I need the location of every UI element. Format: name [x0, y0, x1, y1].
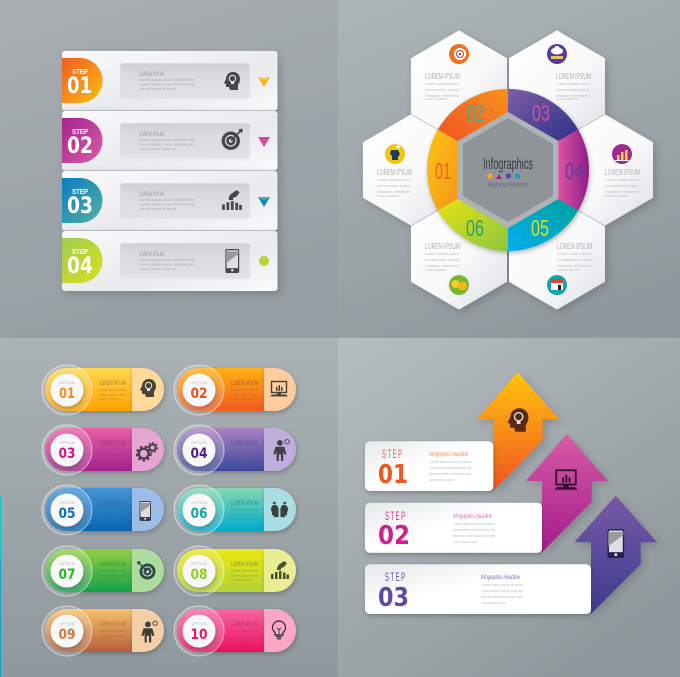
card: step 03: Lorem ipsum dolor sit amet elit [139, 197, 195, 202]
card: step 02: STEP [72, 129, 88, 136]
pill: option 06: Lorem ipsum [231, 516, 252, 521]
card: step 04: 04 [67, 254, 93, 279]
card: step 03: Lorem ipsum dolor sit [139, 206, 177, 211]
card: step 02 text: Infographics Headline [453, 513, 492, 520]
pill: option 08: Lorem ipsum dolor [231, 568, 259, 573]
hexagon labels and text: Lorem ipsum [425, 96, 448, 101]
card: step 01: STEP [72, 69, 88, 76]
pill: option 06: Lorem ipsum dolor [231, 512, 259, 517]
pill: option 10: LOREM IPSUM [231, 622, 258, 628]
pill: option 03: LOREM IPSUM [99, 441, 126, 447]
hexagon labels and text: Lorem ipsum [425, 267, 448, 272]
card: step 01 text: Lorem ipsum dolor [429, 477, 455, 482]
pill: option 03: OPTION [59, 440, 75, 445]
panel: three arrow steps [365, 372, 657, 614]
card: step 03 [62, 171, 278, 230]
segment 06: 06 [466, 215, 484, 241]
card: step 04: Lorem ipsum dolor sit amet elit [139, 257, 195, 262]
arrow: step 02 [526, 434, 608, 552]
card: step 03 text: 03 [378, 583, 409, 613]
centre hexagon [458, 112, 558, 228]
card: step 03: LOREM IPSUM [139, 192, 164, 198]
hexagon labels and text: LOREM IPSUM [377, 168, 412, 177]
segment 03: 03 [532, 100, 550, 126]
pill: option 04: Lorem ipsum [231, 456, 252, 461]
pill: option 07 [42, 546, 164, 596]
card: step 02: Lorem ipsum dolor sit [139, 146, 177, 151]
card: step 04: LOREM IPSUM [139, 252, 164, 258]
segment 04 [558, 130, 589, 210]
card: step 03 text: consectetur adipis cing elit [481, 588, 524, 593]
pill: option 01: Lorem ipsum dolor [99, 392, 127, 397]
pill: option 10: Lorem ipsum [231, 637, 252, 642]
card: step 01: 01 [67, 74, 92, 99]
hexagon labels and text: consectetur adipis [425, 87, 459, 92]
segment 05 [508, 199, 578, 251]
hexagon labels and text: Lorem ipsum dolor [605, 177, 640, 182]
pill: option 08: 08 [190, 567, 208, 583]
card: step 03 text: Nullam eleifend lacinia eget [481, 594, 524, 599]
card: step 01: Lorem ipsum dolor sit amet elit [139, 77, 195, 82]
hexagon labels and text: LOREM IPSUM [556, 72, 591, 81]
card: step 01 text: 01 [378, 460, 408, 490]
card: step 01: LOREM IPSUM [139, 72, 164, 78]
icon: shop badge [547, 275, 567, 295]
hexagon labels and text: Lorem ipsum dolor [557, 251, 592, 256]
pill: option 07: LOREM IPSUM [99, 562, 126, 568]
pill: option 02: Lorem ipsum [231, 396, 252, 401]
pill: option 06: OPTION [191, 500, 207, 505]
pill: option 09 [42, 606, 164, 656]
hexagon petals [363, 30, 653, 310]
pill: option 07: Lorem ipsum [99, 577, 120, 582]
pill: option 09: 09 [58, 627, 76, 643]
pill: option 04: 04 [190, 446, 208, 462]
pill: option 01: LOREM IPSUM [99, 381, 126, 387]
hexagon labels and text: LOREM IPSUM [557, 242, 592, 251]
card: step 01 text: STEP [382, 448, 404, 462]
hexagon labels and text: consectetur adipis [425, 257, 459, 262]
card: step 03: Lorem ipsum dolor sit amet elit [139, 202, 195, 206]
card: step 02 text: Lorem ipsum dolor sit amet [453, 521, 496, 526]
pill: option 03 [42, 425, 164, 475]
segment 01: 01 [435, 158, 451, 184]
pill: option 05: LOREM IPSUM [99, 501, 126, 507]
subtitle: Business Elements: Business Elements [488, 182, 528, 189]
segment 05: 05 [531, 215, 549, 241]
hexagon labels and text: consectetur adipis [377, 183, 411, 188]
pill: option 04: OPTION [191, 440, 207, 445]
pill: option 03: 03 [58, 446, 76, 462]
card: step 03 text: STEP [385, 571, 407, 585]
segment 02: 02 [467, 100, 484, 126]
pill: option 10: Lorem ipsum dolor [231, 633, 259, 638]
pill: option 07: Lorem ipsum dolor [99, 573, 127, 578]
pill: option 10: Lorem ipsum dolor [231, 628, 259, 633]
card: step 03 text: Lorem ipsum dolor sit amet [481, 582, 524, 587]
hexagon labels and text [377, 72, 640, 272]
card: step 01 text [365, 441, 493, 491]
small coloured shapes [487, 173, 530, 179]
hexagon labels and text: Lorem ipsum dolor [556, 81, 591, 86]
pill: option 02: LOREM IPSUM [231, 381, 258, 387]
hexagon labels and text: Lorem ipsum [556, 96, 579, 101]
panel: four step cards [62, 51, 278, 291]
pill: option 10: 10 [190, 627, 208, 643]
card: step 03 text: Lorem ipsum dolor [481, 600, 507, 605]
card: step 03 text [365, 564, 591, 614]
hexagon labels and text: consectetur adipis [605, 183, 639, 188]
hexagon labels and text: consectetur adipis [557, 257, 591, 262]
pill: option 05: Lorem ipsum dolor [99, 512, 127, 517]
hexagon labels and text: Nullam eleifend [425, 93, 459, 98]
pill: option 08: Lorem ipsum [231, 577, 252, 582]
pill: option 05: Lorem ipsum [99, 516, 120, 521]
panel: ten option pills [42, 365, 296, 656]
arrow: step 03 [574, 496, 657, 614]
hexagon labels and text: LOREM IPSUM [425, 72, 460, 81]
hexagon labels and text: Nullam eleifend [377, 189, 411, 194]
pill: option 06: LOREM IPSUM [231, 501, 258, 507]
pill: option 03: Lorem ipsum [99, 456, 120, 461]
pill: option 10 [174, 606, 296, 656]
card: step 02: LOREM IPSUM [139, 132, 164, 138]
hexagon labels and text: Lorem ipsum [377, 193, 400, 198]
card: step 02: Lorem ipsum dolor sit amet elit [139, 142, 195, 146]
pill: option 06: 06 [190, 506, 208, 522]
segment 01 [427, 130, 458, 210]
segment 06 [438, 199, 508, 251]
pill: option 03: Lorem ipsum dolor [99, 452, 127, 457]
card: step 02 text: consectetur adipis cing elit [453, 527, 496, 532]
card: step 03: 03 [67, 194, 93, 219]
pill: option 02: OPTION [191, 380, 207, 385]
card: step 01 text: Infographics Headline [429, 451, 468, 458]
title: Infographics: Infographics [483, 156, 533, 173]
icon: chart badge [612, 144, 632, 164]
segment 04: 04 [565, 158, 583, 184]
pill: option 08: OPTION [191, 561, 207, 566]
pill: option 05: 05 [58, 506, 76, 522]
ring: six coloured segments [427, 89, 589, 251]
pill: option 04: Lorem ipsum dolor [231, 447, 259, 452]
pill: option 05 [42, 485, 164, 535]
pill: option 08 [174, 546, 296, 596]
pill: option 02: Lorem ipsum dolor [231, 387, 259, 392]
pill: option 09: Lorem ipsum [99, 637, 120, 642]
card: step 04: Lorem ipsum dolor sit [139, 266, 177, 271]
segment 03 [508, 89, 578, 141]
pill: option 07: Lorem ipsum dolor [99, 568, 127, 573]
pill: option 04: LOREM IPSUM [231, 441, 258, 447]
hexagon labels and text: Lorem ipsum dolor [377, 177, 412, 182]
pill: option 10: OPTION [191, 621, 207, 626]
pill: option 04 [174, 425, 296, 475]
card: step 04: Lorem ipsum dolor sit amet elit [139, 262, 195, 266]
pill: option 05: OPTION [59, 500, 75, 505]
pill: option 06 [174, 485, 296, 535]
hexagon labels and text: consectetur adipis [556, 87, 590, 92]
hexagon labels and text: Nullam eleifend [605, 189, 639, 194]
pill: option 02: Lorem ipsum dolor [231, 392, 259, 397]
pill: option 01 [42, 365, 164, 415]
pill: option 07: OPTION [59, 561, 75, 566]
card: step 01 text: Nullam eleifend lacinia eget [429, 471, 472, 476]
hexagon labels and text: LOREM IPSUM [605, 168, 640, 177]
pill: option 01: Lorem ipsum [99, 396, 120, 401]
card: step 03 text: Infographics Headline [481, 574, 520, 581]
pill: option 05: Lorem ipsum dolor [99, 507, 127, 512]
hexagon labels and text: Nullam eleifend [556, 93, 590, 98]
card: step 02 [62, 111, 278, 170]
hexagon labels and text: Lorem ipsum dolor [425, 81, 460, 86]
hexagon labels and text: Lorem ipsum dolor [425, 251, 460, 256]
pill: option 07: 07 [58, 567, 76, 583]
pill: option 06: Lorem ipsum dolor [231, 507, 259, 512]
pill: option 09: OPTION [59, 621, 75, 626]
pill: option 03: Lorem ipsum dolor [99, 447, 127, 452]
card: step 02 text: Nullam eleifend lacinia eget [453, 533, 496, 538]
pill: option 04: Lorem ipsum dolor [231, 452, 259, 457]
pill: option 01: 01 [59, 386, 75, 402]
icon: target badge [449, 44, 469, 64]
icon: cloud badge [547, 44, 567, 64]
hexagon labels and text: Nullam eleifend [557, 263, 591, 268]
card: step 02: Lorem ipsum dolor sit amet elit [139, 137, 195, 142]
card: step 01 text: consectetur adipis cing elit [429, 465, 472, 470]
card: step 02 text [365, 503, 542, 553]
hexagon labels and text: LOREM IPSUM [425, 242, 460, 251]
pill: option 08: Lorem ipsum dolor [231, 573, 259, 578]
segment 02 [438, 89, 508, 141]
icon: head badge [385, 144, 405, 164]
card: step 01: Lorem ipsum dolor sit amet elit [139, 82, 195, 86]
card: step 02 text: STEP [385, 510, 407, 524]
card: step 04 [62, 231, 278, 291]
pill: option 09: Lorem ipsum dolor [99, 633, 127, 638]
card: step 02: 02 [67, 134, 93, 159]
hexagon labels and text: Lorem ipsum [557, 267, 580, 272]
panel: hexagon diagram [363, 30, 653, 310]
card: step 02 text: Lorem ipsum dolor [453, 539, 479, 544]
pill: option 01: OPTION [59, 380, 75, 385]
card: step 04: STEP [72, 249, 88, 256]
card: step 01: Lorem ipsum dolor sit [139, 86, 177, 91]
card: step 01 [62, 51, 278, 110]
pill: option 02 [174, 365, 296, 415]
card: step 03: STEP [72, 189, 88, 196]
hexagon labels and text: Nullam eleifend [425, 263, 459, 268]
arrow: step 01 [477, 372, 559, 491]
card: step 01 text: Lorem ipsum dolor sit amet [429, 459, 472, 464]
pill: option 09: LOREM IPSUM [99, 622, 126, 628]
card: step 02 text: 02 [378, 521, 410, 551]
pill: option 08: LOREM IPSUM [231, 562, 258, 568]
pill: option 02: 02 [190, 386, 208, 402]
hexagon labels and text: Lorem ipsum [605, 193, 628, 198]
pill: option 09: Lorem ipsum dolor [99, 628, 127, 633]
icon: coins badge [449, 275, 469, 295]
pill: option 01: Lorem ipsum dolor [99, 387, 127, 392]
